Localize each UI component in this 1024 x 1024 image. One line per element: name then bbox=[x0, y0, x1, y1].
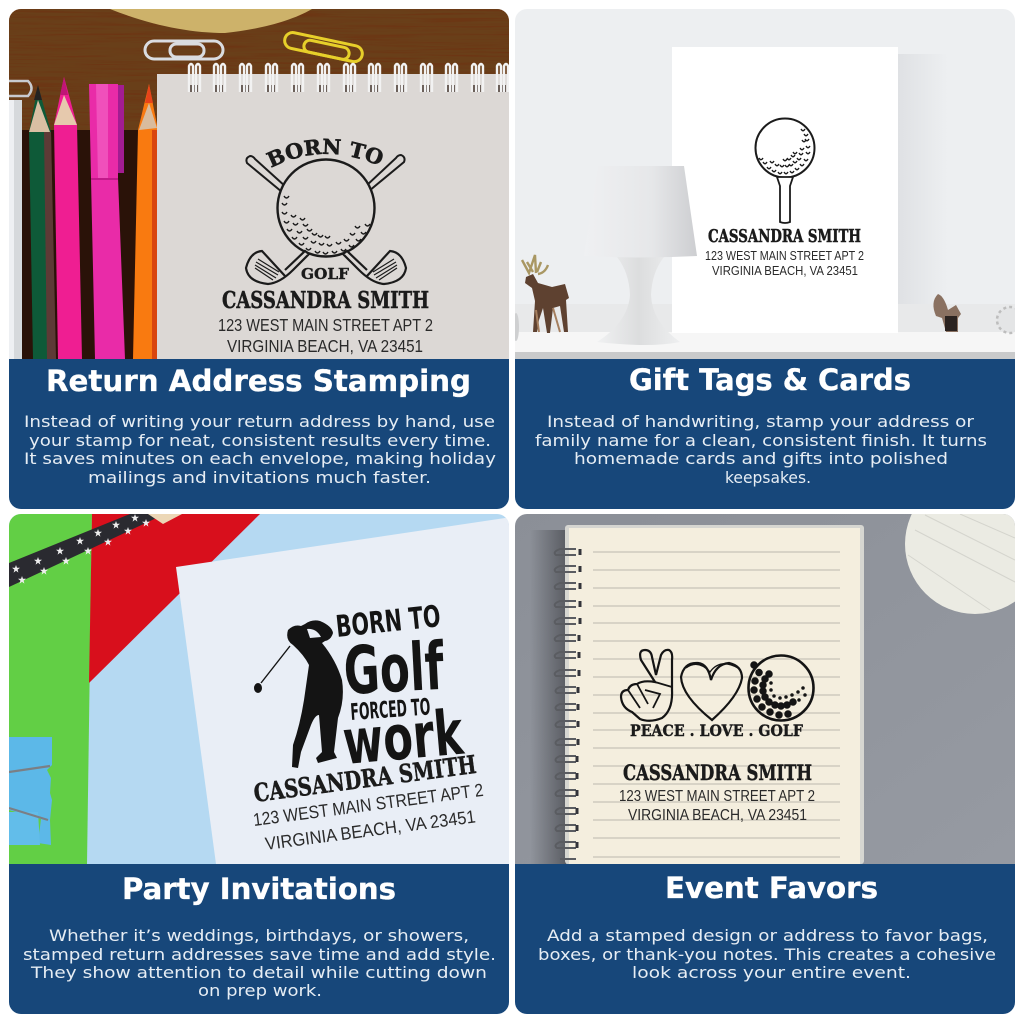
stamp: golf ball on tee: CASSANDRA SMITH bbox=[708, 227, 861, 247]
deer bbox=[522, 255, 569, 333]
spiral binding bbox=[189, 85, 506, 92]
notebook sheet bbox=[157, 74, 509, 359]
stamp: peace love golf: CASSANDRA SMITH bbox=[623, 760, 812, 785]
caption: party invitations: Party Invitations bbox=[122, 872, 396, 906]
dark gap behind pencils bbox=[22, 130, 138, 359]
club shafts bbox=[246, 155, 405, 192]
stamp: born to golf forced to work: VIRGINIA BEACH, VA 23451 bbox=[264, 806, 477, 854]
photo: spiral notebook on grey bbox=[515, 514, 1015, 864]
stamp: born to golf logo: VIRGINIA BEACH, VA 23451 bbox=[227, 336, 423, 356]
panel: party invitations bbox=[9, 514, 515, 1014]
caption: return address stamping: It saves minutes on each envelope, making holiday bbox=[24, 449, 496, 468]
caption: gift tags and cards: homemade cards and gifts into polished bbox=[574, 449, 948, 468]
caption: party invitations bbox=[9, 864, 509, 1014]
stamp: born to golf logo: BORN TO bbox=[265, 138, 383, 168]
pencils bbox=[29, 92, 52, 359]
caption: gift tags and cards: Gift Tags & Cards bbox=[629, 363, 911, 397]
stamp: golf ball on tee: 123 WEST MAIN STREET APT 2 bbox=[705, 248, 864, 263]
stamp: born to golf forced to work: BORN TO bbox=[334, 599, 442, 645]
stamp: born to golf forced to work: FORCED TO bbox=[350, 694, 431, 726]
stamp: born to golf logo bbox=[219, 138, 432, 354]
golfer silhouette bbox=[287, 620, 343, 768]
caption: gift tags and cards bbox=[515, 359, 1015, 509]
stamp: peace love golf: VIRGINIA BEACH, VA 23451 bbox=[628, 807, 807, 824]
panel: return address stamping bbox=[9, 9, 509, 509]
binder clip bbox=[9, 737, 52, 845]
caption: party invitations: on prep work. bbox=[198, 981, 322, 1000]
ruled lines bbox=[593, 552, 840, 857]
caption: gift tags and cards: keepsakes. bbox=[725, 468, 811, 487]
spiral wire bbox=[555, 549, 580, 859]
stamp: born to golf forced to work: CASSANDRA SMITH bbox=[252, 750, 478, 808]
caption: return address stamping: mailings and invitations much faster. bbox=[88, 468, 431, 487]
panel: gift tags and cards bbox=[513, 9, 1023, 509]
paper circle bbox=[905, 514, 1015, 614]
photo: notebook and pencils on wood bbox=[9, 9, 509, 359]
stamp: peace love golf bbox=[619, 650, 815, 824]
stamp: golf ball on tee: VIRGINIA BEACH, VA 23451 bbox=[712, 263, 858, 278]
caption: party invitations: stamped return addresses save time and add style. bbox=[23, 945, 496, 964]
stamp: peace love golf: 123 WEST MAIN STREET APT 2 bbox=[619, 788, 815, 805]
stamp: golf ball on tee bbox=[705, 118, 864, 278]
white card bbox=[672, 47, 898, 333]
lamp bbox=[602, 166, 697, 345]
caption: return address stamping: Instead of writing your return address by hand, use bbox=[24, 412, 495, 431]
caption: event favors: boxes, or thank-you notes. This creates a cohesive bbox=[538, 945, 996, 964]
photo: stamped card on coloured paper bbox=[9, 514, 515, 864]
caption: party invitations: They show attention to detail while cutting down bbox=[30, 963, 487, 982]
stamp: born to golf forced to work: Golf bbox=[342, 628, 447, 710]
caption: return address stamping: Return Address Stamping bbox=[46, 364, 471, 398]
stamp: born to golf logo: 123 WEST MAIN STREET APT 2 bbox=[218, 315, 433, 335]
ball bbox=[278, 160, 374, 256]
caption: gift tags and cards: family name for a clean, consistent finish. It turns bbox=[535, 431, 987, 450]
star pencil bbox=[9, 514, 182, 587]
iron heads bbox=[246, 251, 309, 284]
squirrel bbox=[933, 294, 961, 332]
panel: event favors bbox=[515, 474, 1024, 1014]
stamp: born to golf logo: GOLF bbox=[301, 265, 349, 283]
photo: card on a shelf with lamp bbox=[513, 9, 1023, 359]
stamp: born to golf forced to work: work bbox=[340, 696, 467, 779]
caption: event favors: look across your entire event. bbox=[632, 963, 911, 982]
stamp: born to golf forced to work: 123 WEST MAIN STREET APT 2 bbox=[252, 780, 485, 830]
caption: gift tags and cards: Instead of handwriting, stamp your address or bbox=[547, 412, 974, 431]
stamp: peace love golf: PEACE . LOVE . GOLF bbox=[630, 721, 803, 740]
notebook bbox=[565, 525, 864, 864]
caption: event favors: Add a stamped design or address to favor bags, bbox=[547, 926, 988, 945]
ornaments bbox=[513, 307, 1023, 341]
grid paper edge bbox=[14, 100, 22, 359]
white card bbox=[176, 518, 515, 864]
caption: return address stamping: your stamp for neat, consistent results every time. bbox=[29, 431, 491, 450]
stamp: born to golf forced to work bbox=[252, 599, 485, 854]
caption: party invitations: Whether it’s weddings, birthdays, or showers, bbox=[49, 926, 469, 945]
caption: event favors bbox=[515, 864, 1015, 1014]
stamp: born to golf logo: CASSANDRA SMITH bbox=[222, 287, 429, 314]
caption: event favors: Event Favors bbox=[665, 871, 878, 905]
caption: return address stamping bbox=[9, 359, 509, 509]
paper clips bbox=[145, 31, 364, 63]
